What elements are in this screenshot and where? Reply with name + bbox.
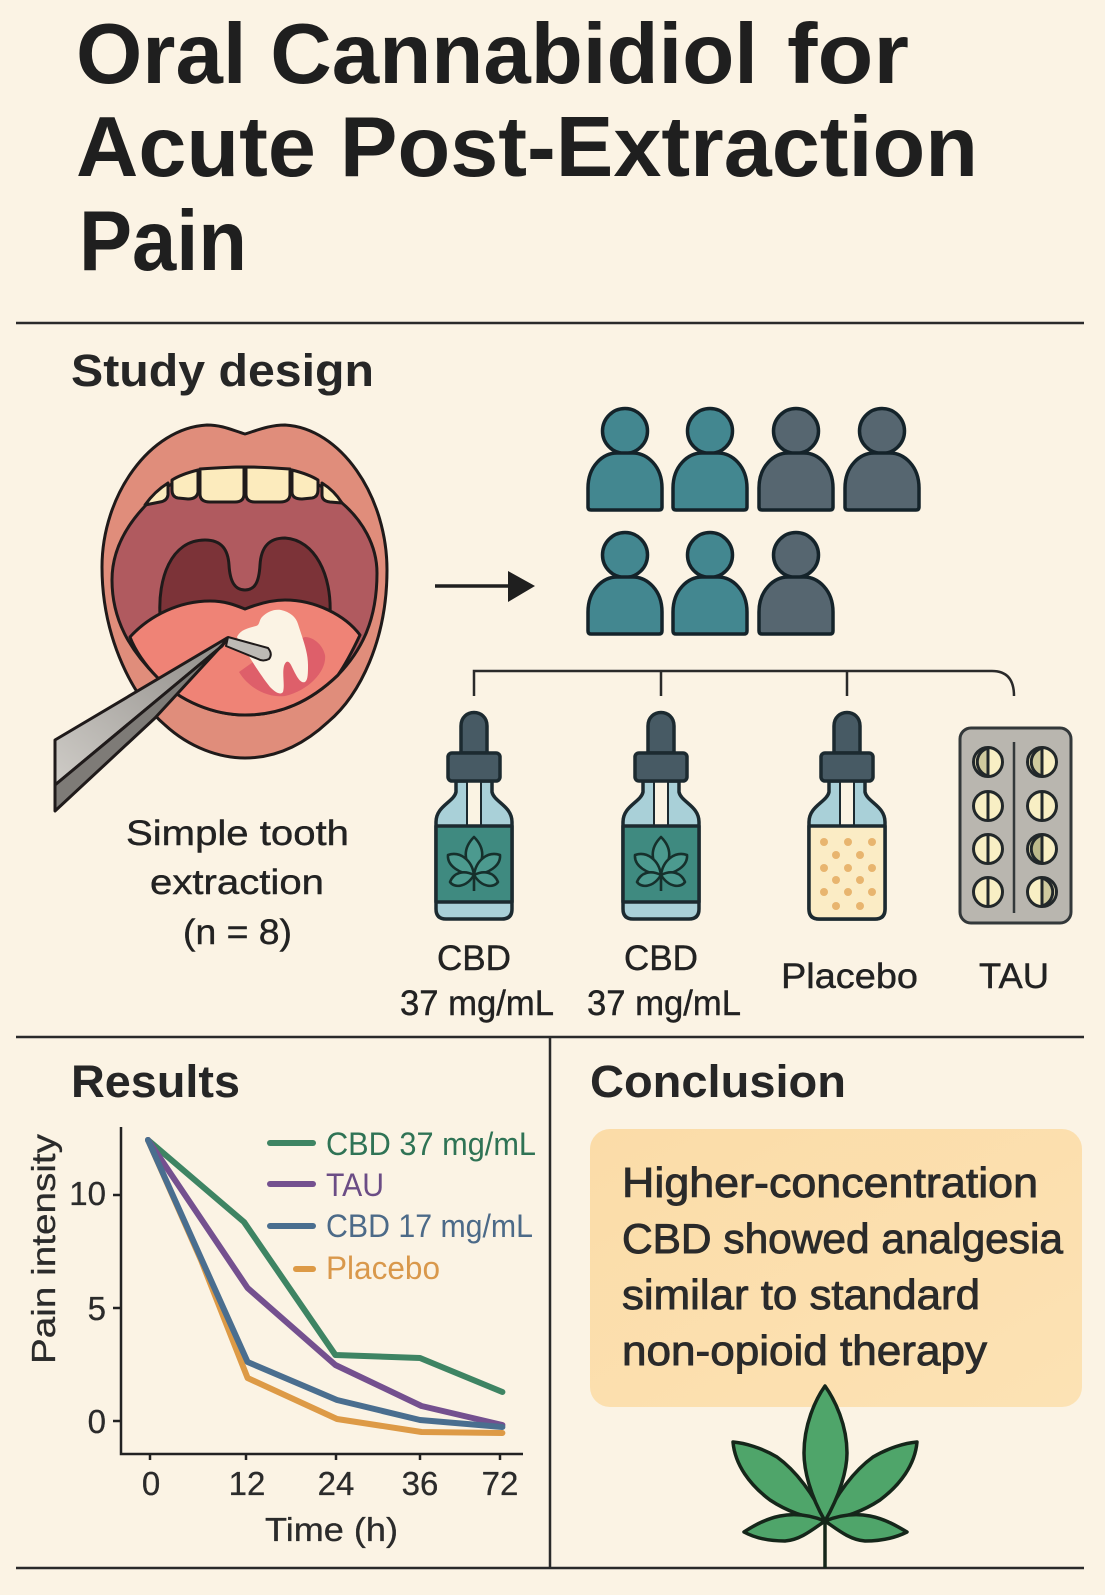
title: Acute Post-Extraction: [76, 100, 978, 195]
legend: [270, 1126, 536, 1286]
line chart: pain intensity over time: [25, 1126, 536, 1548]
text: simple tooth extraction: (n = 8): [183, 913, 292, 952]
x tick labels: 0: [142, 1465, 160, 1502]
icon: placebo bottle: [809, 712, 885, 919]
y tick labels: [69, 1175, 106, 1440]
label: placebo arm: Placebo: [781, 957, 918, 996]
extraction socket: [239, 637, 325, 696]
callout: conclusion box: similar to standard: [622, 1271, 980, 1318]
y tick labels: 0: [88, 1403, 106, 1440]
legend: CBD 17 mg/mL: [326, 1208, 533, 1244]
series: CBD 37 mg/mL: [148, 1140, 502, 1392]
title: Oral Cannabidiol: [76, 7, 758, 102]
series: TAU: [148, 1140, 502, 1425]
person: [588, 532, 662, 634]
bracket: randomisation arms: [474, 671, 1014, 696]
y tick labels: 10: [69, 1175, 106, 1212]
forceps lower blade: [55, 642, 225, 811]
axes: [113, 1127, 523, 1460]
icon: CBD bottle 2: [623, 712, 699, 919]
heading: conclusion: Conclusion: [590, 1056, 846, 1107]
x axis title: Time (h): [265, 1511, 398, 1548]
callout: conclusion box: non-opioid therapy: [622, 1327, 987, 1374]
forceps grip: [226, 637, 271, 660]
person: [673, 408, 747, 510]
x tick labels: 72: [482, 1465, 518, 1502]
label: CBD 37 mg/mL arm 1: 37 mg/mL: [400, 984, 554, 1023]
palate: [112, 467, 377, 715]
callout: conclusion box: CBD showed analgesia: [622, 1215, 1064, 1262]
person: [759, 532, 833, 634]
text: simple tooth extraction: extraction: [150, 863, 324, 902]
upper teeth: [145, 467, 342, 505]
y tick labels: 5: [88, 1290, 106, 1327]
text: simple tooth extraction: [126, 814, 349, 952]
icon: blister pack (TAU): [960, 728, 1071, 923]
arrow: [435, 571, 535, 602]
callout: conclusion box: Higher-concentration: [622, 1159, 1038, 1206]
extracted tooth: [237, 610, 308, 693]
person: [845, 408, 919, 510]
label: CBD 37 mg/mL arm 1: [400, 939, 554, 1023]
x tick labels: 24: [318, 1465, 354, 1502]
person: [673, 532, 747, 634]
title: for: [787, 7, 909, 102]
label: CBD 37 mg/mL arm 2: [587, 939, 741, 1023]
legend: CBD 37 mg/mL: [326, 1126, 536, 1162]
series: CBD 17 mg/mL: [148, 1140, 502, 1427]
forceps upper blade: [55, 638, 227, 785]
title: [76, 7, 978, 289]
y axis title: Pain intensity: [25, 1133, 62, 1364]
person: [759, 408, 833, 510]
callout: conclusion box: [590, 1129, 1082, 1407]
label: CBD 37 mg/mL arm 1: CBD: [437, 939, 511, 978]
icon: open mouth with tooth extraction: [55, 425, 387, 811]
icon: CBD bottle 1: [436, 712, 512, 919]
title: Pain: [79, 194, 247, 289]
heading: results: Results: [71, 1056, 240, 1107]
x tick labels: [142, 1465, 518, 1502]
throat: [160, 538, 330, 640]
legend: Placebo: [326, 1250, 440, 1286]
x tick labels: 36: [402, 1465, 438, 1502]
label: TAU arm: TAU: [979, 957, 1049, 996]
x tick labels: 12: [229, 1465, 265, 1502]
heading: study design: Study design: [71, 345, 374, 396]
icon: cannabis leaf: [733, 1386, 917, 1568]
icon group: participants: [588, 408, 919, 634]
label: CBD 37 mg/mL arm 2: CBD: [624, 939, 698, 978]
tongue: [130, 600, 360, 715]
legend: TAU: [326, 1167, 384, 1203]
text: simple tooth extraction: Simple tooth: [126, 814, 349, 853]
lips: [102, 425, 387, 758]
series: placebo: [148, 1140, 502, 1433]
person: [588, 408, 662, 510]
label: CBD 37 mg/mL arm 2: 37 mg/mL: [587, 984, 741, 1023]
